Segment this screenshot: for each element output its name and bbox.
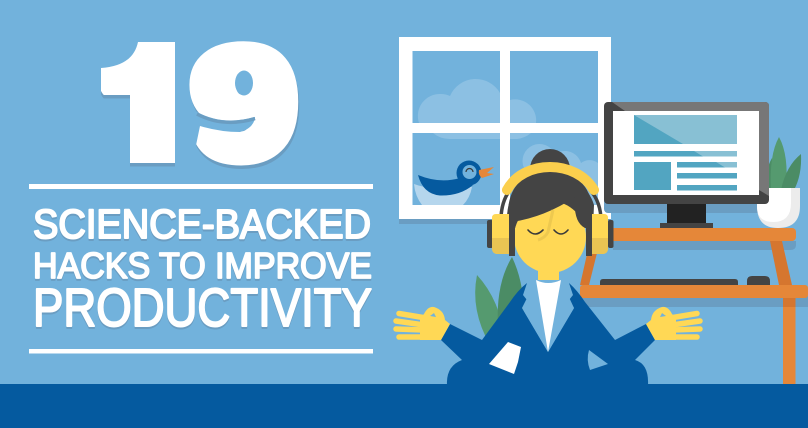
lapel inner [522, 280, 574, 352]
shirt [536, 280, 561, 352]
subtitle heading: HACKS TO IMPROVE [33, 247, 372, 288]
hair bun [530, 149, 570, 189]
title number 19: 1 [106, 23, 198, 191]
monitor [604, 102, 769, 228]
left hand [396, 307, 450, 340]
subtitle heading: SCIENCE-BACKED [33, 203, 371, 249]
left ear cup [487, 210, 515, 256]
right hand [646, 307, 700, 340]
title number 19 [101, 41, 300, 169]
title number 19: 9 [195, 24, 295, 191]
eyes [528, 230, 568, 234]
subtitle heading: PRODUCTIVITY [33, 278, 372, 338]
hair fringe [507, 174, 594, 228]
subtitle heading: HACKS TO IMPROVE [33, 245, 372, 286]
bottom rule [29, 349, 373, 354]
bezel [604, 102, 769, 204]
screen [613, 111, 759, 195]
subtitle heading: PRODUCTIVITY [33, 280, 372, 340]
monitor shadow [604, 190, 769, 213]
desk [578, 228, 808, 384]
title number 19: 1 [106, 20, 198, 187]
stand [667, 204, 706, 223]
headphone band inner [501, 190, 601, 225]
desk top shelf [605, 228, 796, 241]
keyboard [600, 279, 738, 285]
cloud in window [418, 79, 536, 139]
hair [508, 172, 593, 228]
desk shadows [613, 241, 796, 250]
window [399, 37, 611, 224]
subtitle heading: SCIENCE-BACKED [33, 201, 371, 247]
headband [507, 167, 594, 190]
jacket [441, 283, 655, 385]
title number 19: 9 [194, 20, 294, 188]
small cloud behind head [522, 144, 598, 205]
white cuff shape [489, 342, 521, 374]
plant on desk [757, 137, 801, 228]
mouse [747, 276, 770, 285]
face [514, 201, 586, 273]
top rule [29, 184, 373, 189]
icon: bird [414, 160, 494, 205]
desk lower shelf [580, 285, 808, 298]
leg gap [588, 350, 608, 370]
neck [538, 265, 559, 285]
floor band [0, 384, 808, 428]
desk legs [580, 241, 600, 285]
subtitle heading [33, 201, 372, 340]
pot [757, 188, 800, 228]
plant behind person [475, 257, 524, 345]
right ear cup [586, 210, 614, 256]
person meditating [396, 149, 700, 385]
screen layout [634, 115, 737, 144]
nose shadow [538, 210, 553, 240]
